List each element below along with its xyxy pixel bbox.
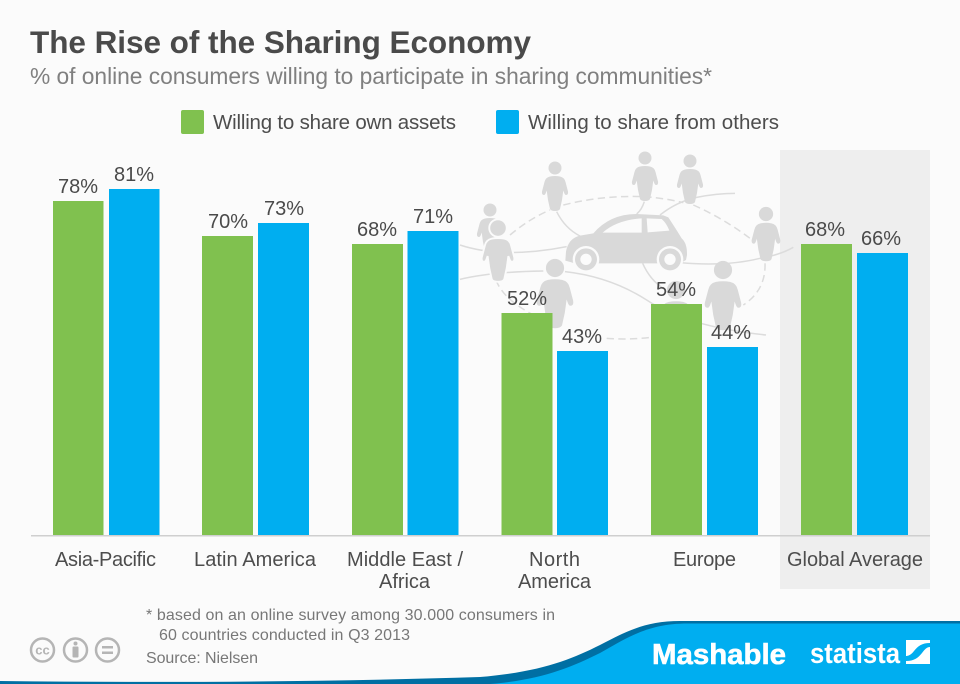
icon: car	[565, 214, 687, 273]
category labels	[55, 549, 923, 593]
category labels: Asia-Pacific	[55, 549, 156, 571]
footnote: 60 countries conducted in Q3 2013	[159, 627, 410, 644]
footnote: * based on an online survey among 30.000 consumers in	[146, 607, 555, 624]
icon: statista mark	[906, 640, 930, 664]
bar group: Europe	[651, 279, 758, 535]
legend item: own assets: Willing to share own assets	[213, 111, 456, 134]
category labels: North	[529, 549, 580, 571]
axis line	[31, 535, 930, 536]
title: The Rise of the Sharing Economy	[30, 24, 531, 60]
bar group: Latin America: 70%	[208, 211, 248, 233]
bar group: Latin America: 73%	[264, 198, 304, 220]
bar group: Asia-Pacific: 81%	[114, 164, 154, 186]
legend	[181, 110, 779, 134]
footnote	[146, 607, 555, 667]
category labels: Europe	[673, 549, 736, 571]
source: Source: Nielsen	[146, 650, 258, 667]
panel: global average background	[780, 150, 930, 589]
legend item: from others: Willing to share from others	[528, 111, 779, 134]
bar group: Asia-Pacific	[53, 164, 160, 535]
bar group: North America	[502, 288, 608, 535]
icon: creative commons licence	[31, 638, 119, 662]
bar group: North America: 43%	[562, 326, 602, 348]
bar group: Global Average: 66%	[861, 228, 901, 250]
bar group: Asia-Pacific: 78%	[58, 176, 98, 198]
bar group: Global Average	[801, 219, 908, 535]
logo: statista: statista	[810, 638, 901, 670]
illustration: car and people network	[460, 152, 793, 350]
category labels: Latin America	[194, 549, 317, 571]
category labels: America	[518, 571, 592, 593]
bar group: Middle East / Africa: 71%	[413, 206, 453, 228]
bar group: Middle East / Africa: 68%	[357, 219, 397, 241]
icon: people	[477, 152, 780, 350]
bar group: North America: 52%	[507, 288, 547, 310]
category labels: Middle East /	[347, 549, 463, 571]
footer wave	[0, 621, 960, 684]
bar group: Europe: 54%	[656, 279, 696, 301]
bar group: Latin America	[202, 198, 309, 535]
bar group: Middle East / Africa	[352, 206, 458, 535]
category labels: Africa	[379, 571, 431, 593]
category labels: Global Average	[787, 549, 923, 571]
icon: creative commons licence: cc	[35, 642, 50, 658]
bar group: Europe: 44%	[711, 322, 751, 344]
subtitle: % of online consumers willing to participate in sharing communities*	[30, 63, 712, 89]
bar group: Global Average: 68%	[805, 219, 845, 241]
logo: Mashable: Mashable	[652, 639, 786, 671]
